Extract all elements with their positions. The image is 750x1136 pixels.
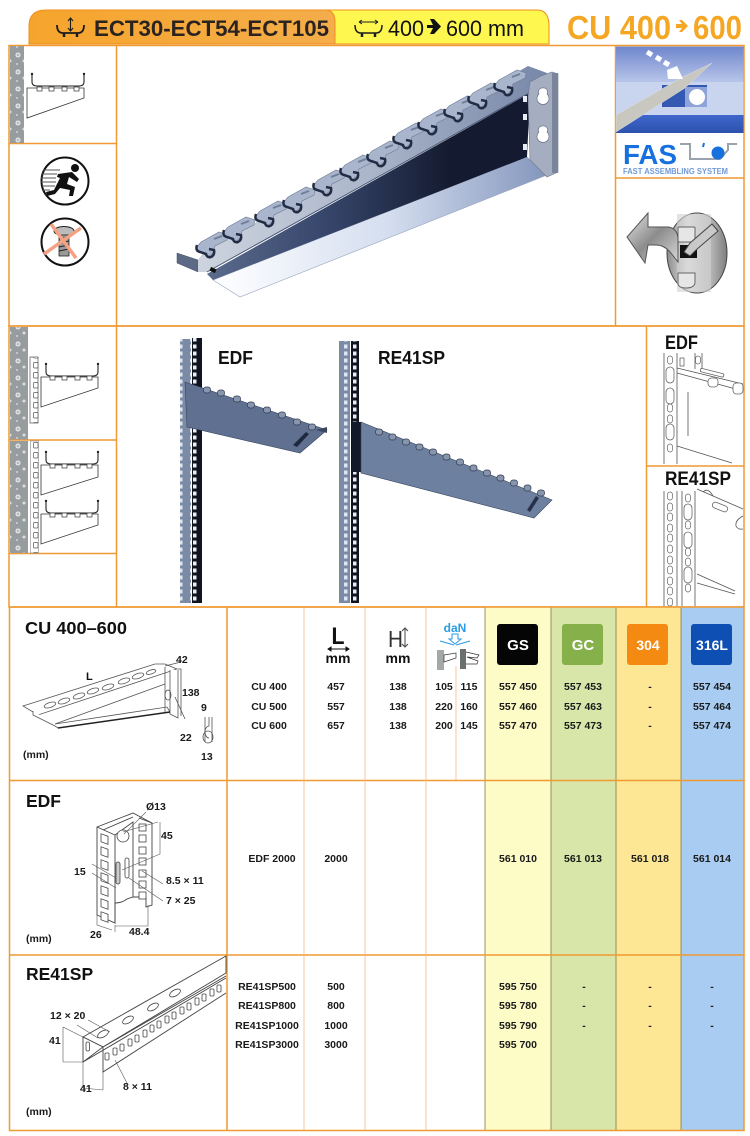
table row: EDF 2000: 561 014 (693, 853, 731, 865)
table rows: CU: 105 (435, 681, 453, 693)
table row: EDF 2000: 561 018 (631, 853, 669, 865)
table rows: RE41SP: - (582, 1020, 586, 1032)
table rows: RE41SP: - (710, 1000, 714, 1012)
icon: wall mounted bracket (10, 46, 85, 143)
badge: GC: GC (572, 637, 594, 654)
panel: EDF line drawing: EDF (665, 333, 698, 354)
panel: middle frame grid (9, 326, 744, 607)
table rows: CU: - (648, 720, 652, 732)
table rows: RE41SP: 1000 (324, 1020, 348, 1032)
logo: FAS fast assembling system: FAST ASSEMBLING SYSTEM (623, 167, 728, 176)
product photo: RE41SP post with bracket (339, 341, 552, 603)
panel: EDF dimension drawing: 48.4 (129, 926, 150, 938)
table rows: CU: 557 454 (693, 681, 731, 693)
panel: RE41SP dimension drawing: 8 × 11 (123, 1081, 152, 1093)
table rows: CU: 160 (460, 701, 478, 713)
table rows: CU: 200 (435, 720, 453, 732)
panel: RE41SP dimension drawing (26, 956, 226, 1118)
table rows: RE41SP: - (710, 1020, 714, 1032)
panel: EDF dimension drawing: 26 (90, 929, 102, 941)
product range title: CU 400 (567, 9, 671, 46)
table rows: CU: 138 (389, 701, 407, 713)
table rows: CU: CU 500 (251, 701, 287, 713)
panel: CU 400-600 dimension drawing: 138 (182, 687, 200, 699)
panel: EDF dimension drawing: 45 (161, 830, 173, 842)
icon: double rail mounted brackets (10, 441, 99, 553)
table header: height: H (388, 626, 403, 652)
table rows: CU: 557 463 (564, 701, 602, 713)
table rows: RE41SP: RE41SP800 (238, 1000, 296, 1012)
table rows: CU: 557 470 (499, 720, 537, 732)
table header: height (386, 626, 410, 666)
table header: height: mm (386, 650, 410, 666)
table row: EDF 2000: 561 010 (499, 853, 537, 865)
product photo: EDF post with bracket (180, 338, 327, 603)
icon: fast running man (41, 158, 88, 204)
table row: EDF 2000: 2000 (324, 853, 348, 865)
table rows: RE41SP: - (582, 1000, 586, 1012)
table header: length: L (332, 623, 344, 650)
table rows: RE41SP: RE41SP3000 (235, 1039, 299, 1051)
panel: EDF line drawing (664, 333, 743, 464)
badge: GS (497, 624, 538, 665)
table rows: CU: 557 464 (693, 701, 731, 713)
panel: EDF dimension drawing: 15 (74, 866, 86, 878)
header tab: cable tray series (29, 10, 335, 44)
panel: EDF dimension drawing: (mm) (26, 933, 52, 945)
table rows: CU: - (648, 681, 652, 693)
table rows: RE41SP: - (648, 1020, 652, 1032)
panel: RE41SP line drawing (664, 469, 743, 606)
table row: EDF 2000: EDF 2000 (248, 853, 296, 865)
table rows: CU: - (648, 701, 652, 713)
table rows: RE41SP: 595 700 (499, 1039, 537, 1051)
table rows: CU: 138 (389, 681, 407, 693)
table header: load daN (437, 621, 479, 670)
table rows: RE41SP: - (648, 1000, 652, 1012)
panel: CU 400-600 dimension drawing: 13 (201, 751, 213, 763)
label: EDF: EDF (218, 348, 253, 368)
panel: CU 400-600 dimension drawing: 9 (201, 702, 207, 714)
table rows: RE41SP: - (710, 981, 714, 993)
panel: CU 400-600 dimension drawing (23, 618, 213, 763)
header tab: cable tray series: ECT30-ECT54-ECT105 (94, 16, 329, 41)
logo: FAS fast assembling system: FAS (623, 139, 677, 170)
panel: CU 400-600 dimension drawing: L (86, 671, 93, 683)
table rows: CU: CU 400 (251, 681, 287, 693)
panel: CU 400-600 dimension drawing: 42 (176, 654, 188, 666)
icon: no screws needed (42, 218, 88, 266)
table rows: RE41SP: 595 790 (499, 1020, 537, 1032)
table rows: CU: 557 460 (499, 701, 537, 713)
product range title (567, 9, 742, 46)
table rows: RE41SP: RE41SP1000 (235, 1020, 299, 1032)
table rows: RE41SP: 595 780 (499, 1000, 537, 1012)
table rows: RE41SP: 800 (327, 1000, 345, 1012)
table rows: CU (251, 681, 731, 732)
table rows: RE41SP: 595 750 (499, 981, 537, 993)
logo: FAS fast assembling system (623, 139, 737, 176)
table rows: CU: 138 (389, 720, 407, 732)
icon: rail mounted bracket (10, 327, 99, 440)
panel: EDF dimension drawing: EDF (26, 791, 61, 811)
label: RE41SP: RE41SP (378, 348, 445, 368)
table rows: CU: 557 (327, 701, 345, 713)
table rows: CU: 145 (460, 720, 478, 732)
table rows: CU: 557 474 (693, 720, 731, 732)
panel: EDF dimension drawing: 8.5 × 11 (166, 875, 204, 887)
panel: RE41SP dimension drawing: 41 (80, 1083, 92, 1095)
table header: load daN: daN (444, 621, 466, 635)
header tab: tray width range: 600 mm (446, 16, 524, 41)
table rows: RE41SP: - (648, 981, 652, 993)
table rows: CU: 557 453 (564, 681, 602, 693)
table rows: RE41SP: RE41SP500 (238, 981, 296, 993)
badge: GC (562, 624, 603, 665)
table header: length (326, 623, 350, 666)
panel: RE41SP dimension drawing: (mm) (26, 1106, 52, 1118)
table grid lines (9, 607, 744, 1130)
badge: 304 (627, 624, 668, 665)
table rows: CU: 457 (327, 681, 345, 693)
panel: EDF dimension drawing: 7 × 25 (166, 895, 196, 907)
panel: RE41SP dimension drawing: 41 (49, 1035, 61, 1047)
table colour column backgrounds (485, 607, 744, 1130)
panel: CU 400-600 dimension drawing: (mm) (23, 749, 49, 761)
badge: 304: 304 (636, 637, 660, 653)
table rows: CU: 557 473 (564, 720, 602, 732)
table rows: CU: CU 600 (251, 720, 287, 732)
table row: EDF 2000: 561 013 (564, 853, 602, 865)
table rows: RE41SP (235, 981, 714, 1051)
panel: top frame grid (9, 46, 744, 326)
table header: length: mm (326, 650, 350, 666)
table rows: CU: 657 (327, 720, 345, 732)
product range title: 600 (693, 9, 742, 46)
panel: CU 400-600 dimension drawing: 22 (180, 732, 192, 744)
panel: EDF dimension drawing: Ø13 (146, 801, 166, 813)
table rows: RE41SP: 3000 (324, 1039, 348, 1051)
panel: RE41SP line drawing: RE41SP (665, 469, 731, 490)
header tab: tray width range: 400 (388, 16, 424, 41)
table row: EDF 2000 (248, 853, 731, 865)
badge: 316L (691, 624, 732, 665)
panel: EDF dimension drawing (26, 791, 204, 945)
table rows: RE41SP: - (582, 981, 586, 993)
table rows: CU: 557 450 (499, 681, 537, 693)
table rows: CU: 115 (461, 681, 478, 693)
table rows: RE41SP: 500 (327, 981, 345, 993)
badge: 316L: 316L (696, 637, 728, 653)
table rows: CU: 220 (435, 701, 453, 713)
icon: clip-in assembly arrow (627, 213, 727, 293)
panel: CU 400-600 dimension drawing: CU 400–600 (25, 618, 127, 638)
panel: RE41SP dimension drawing: 12 × 20 (50, 1010, 85, 1022)
main product photo: CU bracket (177, 66, 558, 297)
panel: fast assembling illustration (616, 46, 744, 133)
badge: GS: GS (507, 637, 529, 654)
header tab: tray width range (325, 10, 549, 44)
panel: RE41SP dimension drawing: RE41SP (26, 964, 93, 984)
